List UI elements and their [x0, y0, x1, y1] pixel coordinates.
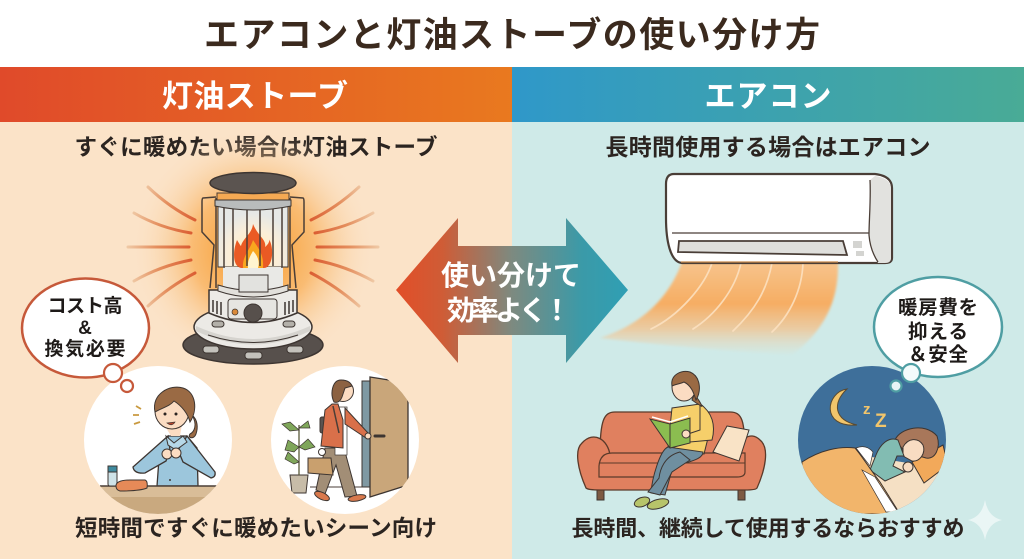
- caption: air conditioner scene: 長時間、継続して使用するならおすすめ: [572, 516, 964, 541]
- panel: kerosene stove background: [0, 122, 512, 559]
- callout: saves heating cost and safe: 暖房費を: [898, 297, 978, 319]
- title: エアコンと灯油ストーブの使い分け方: [204, 15, 820, 55]
- arrow: use both efficiently: 効率よく！: [447, 295, 571, 326]
- callout: saves heating cost and safe: [874, 277, 1002, 392]
- illustration: woman sleeping at night: Z: [875, 411, 887, 432]
- header: kerosene stove: 灯油ストーブ: [162, 79, 348, 114]
- header: kerosene stove: [0, 67, 512, 122]
- callout: cost and ventilation: &: [78, 318, 92, 339]
- illustration: woman warming up at a table: [84, 366, 232, 517]
- callout: cost and ventilation: [22, 278, 149, 392]
- panel: air conditioner background: [512, 122, 1024, 559]
- subheading: kerosene stove: すぐに暖めたい場合は灯油ストーブ: [74, 134, 438, 160]
- icon: air conditioner with warm airflow: [600, 174, 892, 355]
- arrow: use both efficiently: [396, 218, 628, 363]
- icon: kerosene stove with heat rays: [128, 128, 378, 372]
- illustration: woman reading on sofa: [578, 372, 766, 511]
- illustration: woman sleeping at night: [798, 366, 950, 520]
- callout: saves heating cost and safe: 抑える: [908, 321, 968, 343]
- subheading: air conditioner: 長時間使用する場合はエアコン: [606, 134, 930, 160]
- illustration: person leaving through a door: [271, 366, 419, 514]
- arrow: use both efficiently: 使い分けて: [441, 260, 581, 291]
- callout: cost and ventilation: コスト高: [48, 295, 122, 317]
- callout: saves heating cost and safe: ＆安全: [908, 344, 968, 366]
- callout: cost and ventilation: 換気必要: [44, 337, 126, 360]
- caption: kerosene stove scene: 短時間ですぐに暖めたいシーン向け: [75, 516, 437, 541]
- illustration: woman sleeping at night: z: [863, 401, 870, 418]
- header: air conditioner: エアコン: [704, 79, 832, 114]
- icon: sparkle: [968, 500, 1002, 540]
- header: air conditioner: [512, 67, 1024, 122]
